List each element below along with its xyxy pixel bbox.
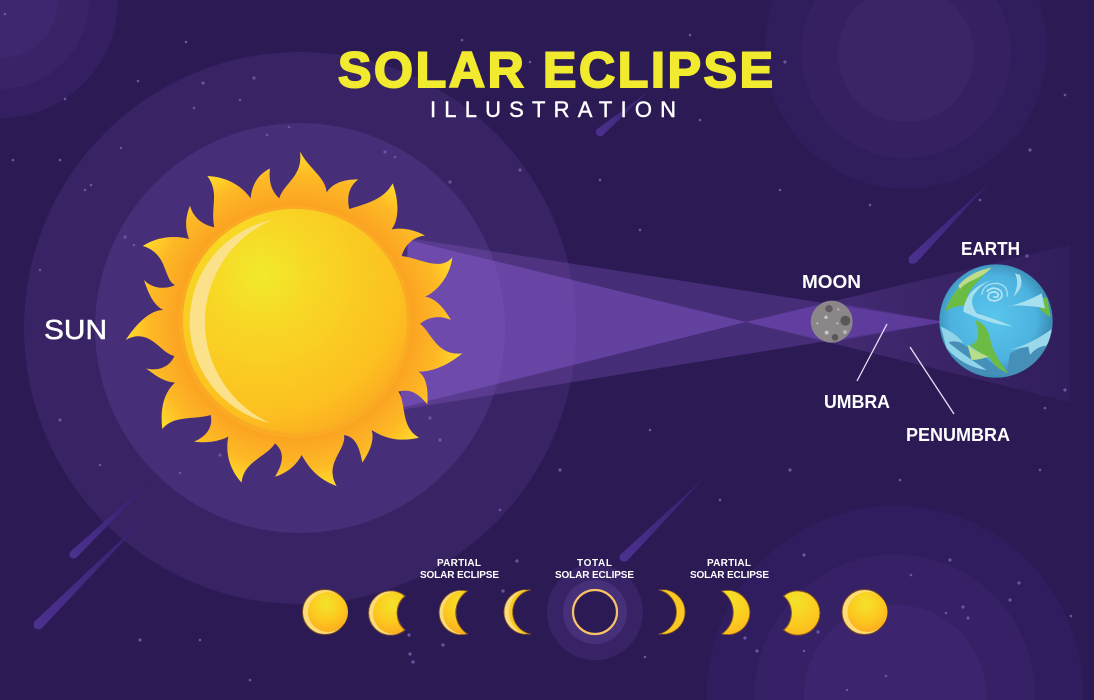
phase 6: thin crescent <box>658 590 686 634</box>
label: sun: SUN <box>44 314 107 345</box>
phase 2: partial <box>368 590 406 636</box>
label: partial solar eclipse left: PARTIAL <box>437 558 481 569</box>
label: partial solar eclipse left: SOLAR ECLIPSE <box>420 570 499 581</box>
label: total solar eclipse: TOTAL <box>577 558 612 569</box>
title: SOLAR ECLIPSE <box>338 42 773 98</box>
label: partial solar eclipse right: SOLAR ECLIPSE <box>690 570 769 581</box>
background circles: top right <box>765 0 1047 189</box>
background circles: top left <box>0 0 118 118</box>
phase 1: full sun <box>302 590 348 634</box>
label: penumbra: PENUMBRA <box>906 425 1010 445</box>
sun highlight <box>190 220 272 423</box>
umbra leader line <box>857 324 887 381</box>
sun rim <box>179 206 411 438</box>
label: total solar eclipse: SOLAR ECLIPSE <box>555 570 634 581</box>
label: umbra: UMBRA <box>824 392 890 412</box>
phase 8: partial <box>783 590 820 636</box>
subtitle: ILLUSTRATION <box>430 97 676 122</box>
phase 9: full sun <box>842 590 888 634</box>
phase 3: partial <box>438 590 468 635</box>
label: partial solar eclipse right: PARTIAL <box>707 558 751 569</box>
earth <box>939 264 1053 378</box>
shadow cones: umbra and penumbra <box>400 238 1070 410</box>
sun <box>126 152 462 486</box>
sun halo <box>24 52 576 604</box>
eclipse phases <box>302 564 888 660</box>
phase 5: total eclipse with halo <box>547 564 643 660</box>
label: moon: MOON <box>802 272 861 292</box>
label: earth: EARTH <box>961 239 1020 259</box>
background circles: bottom right <box>707 506 1083 700</box>
sun flames <box>126 152 462 486</box>
sun disc <box>183 209 407 433</box>
phase 7: partial <box>721 590 750 635</box>
shooting star streaks <box>34 90 992 629</box>
moon <box>811 301 853 343</box>
penumbra leader line <box>910 347 954 414</box>
phase 4: thin crescent <box>504 590 531 634</box>
